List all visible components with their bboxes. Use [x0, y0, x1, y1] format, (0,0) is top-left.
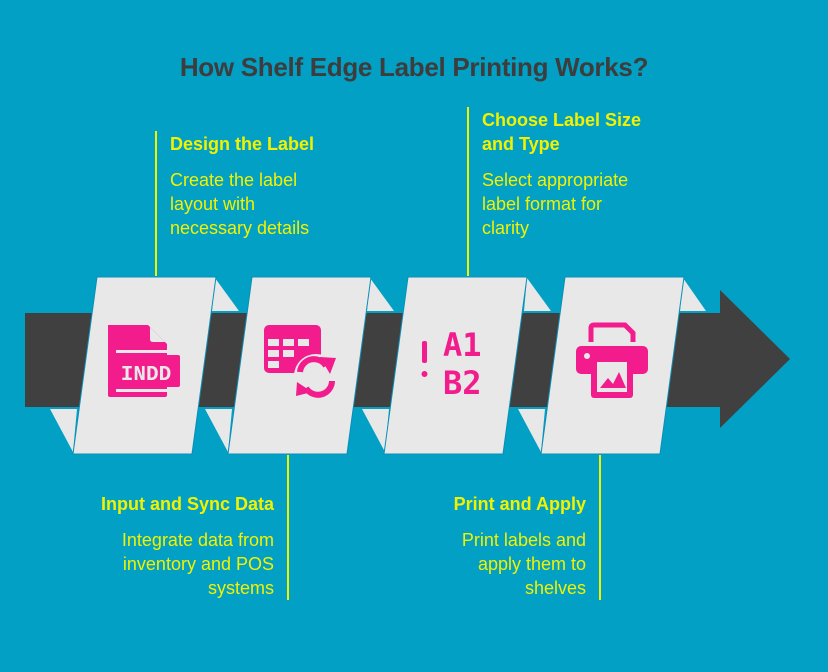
- panel 4: [518, 277, 706, 454]
- text: choose label size: [482, 110, 641, 238]
- text: input and sync data: Integrate data from inventory and POS systems: [122, 530, 274, 598]
- text: choose label size: Select appropriate label format for clarity: [482, 170, 628, 238]
- icon: A1 B2: A1: [443, 326, 482, 364]
- panel 2: [205, 277, 394, 454]
- text: input and sync data: [101, 494, 274, 598]
- panel 1: [50, 277, 239, 454]
- text: design the label: Design the Label: [170, 134, 314, 154]
- panel 3: [362, 277, 551, 454]
- title: How Shelf Edge Label Printing Works?: [180, 52, 648, 82]
- arrow band: [25, 290, 790, 428]
- icon: A1 B2: [422, 326, 482, 402]
- text: print and apply: Print and Apply: [454, 494, 586, 514]
- text: design the label: [170, 134, 314, 238]
- icon: INDD file: [108, 325, 180, 397]
- icon: printer: [576, 325, 648, 398]
- text: input and sync data: Input and Sync Data: [101, 494, 274, 514]
- icon: A1 B2: B2: [443, 364, 482, 402]
- text: design the label: Create the label layout with necessary details: [170, 170, 309, 238]
- text: choose label size: Choose Label Size and Type: [482, 110, 641, 154]
- text: print and apply: Print labels and apply them to shelves: [462, 530, 586, 598]
- icon: table sync: [264, 325, 338, 398]
- connector lines: [156, 107, 600, 600]
- text: print and apply: [454, 494, 586, 598]
- icon: INDD file: INDD: [121, 364, 171, 387]
